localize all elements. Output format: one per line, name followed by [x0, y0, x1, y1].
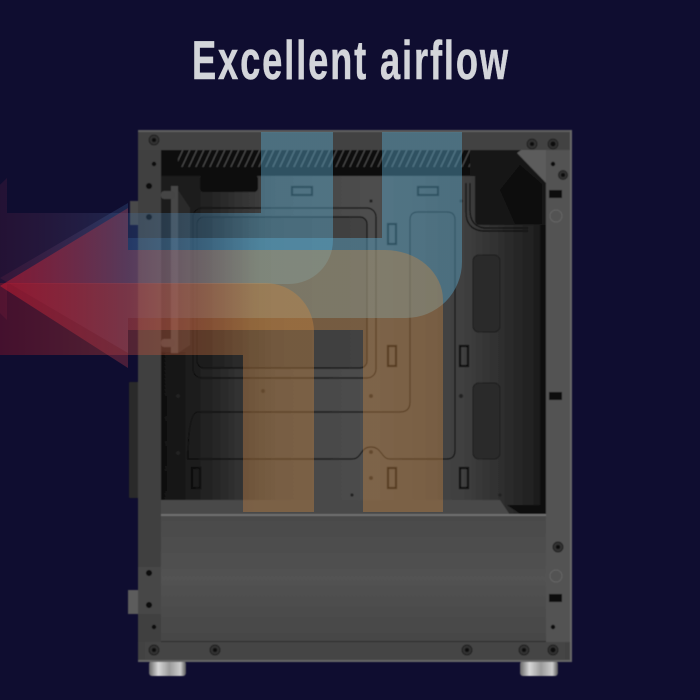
orange arrow 1	[0, 283, 314, 512]
case feet	[149, 661, 558, 676]
airflow: blue cool intake and exhaust arrows	[0, 132, 462, 353]
screws and holes	[146, 135, 568, 655]
airflow: orange warm exhaust arrows	[0, 208, 443, 512]
cable tie slots	[192, 187, 468, 488]
standoffs	[176, 199, 502, 497]
side tabs	[128, 201, 160, 614]
PSU shroud	[161, 514, 546, 642]
blue arrow 1	[0, 132, 333, 320]
fan seen side-on	[161, 176, 191, 353]
expansion slots	[161, 396, 167, 491]
case frame	[138, 130, 572, 662]
blue arrow 2	[0, 132, 462, 353]
cable routing lines	[466, 183, 528, 231]
orange arrow 2	[0, 208, 443, 512]
motherboard tray outlines	[188, 208, 455, 459]
interior back panel	[161, 150, 546, 515]
title: Excellent airflow	[192, 29, 509, 91]
drive cage dark corner	[470, 150, 546, 225]
oblong cut-outs	[473, 255, 500, 459]
bottom rail	[138, 567, 565, 660]
computer case	[128, 130, 572, 676]
top vent	[161, 150, 496, 192]
bottom vent	[161, 500, 510, 515]
